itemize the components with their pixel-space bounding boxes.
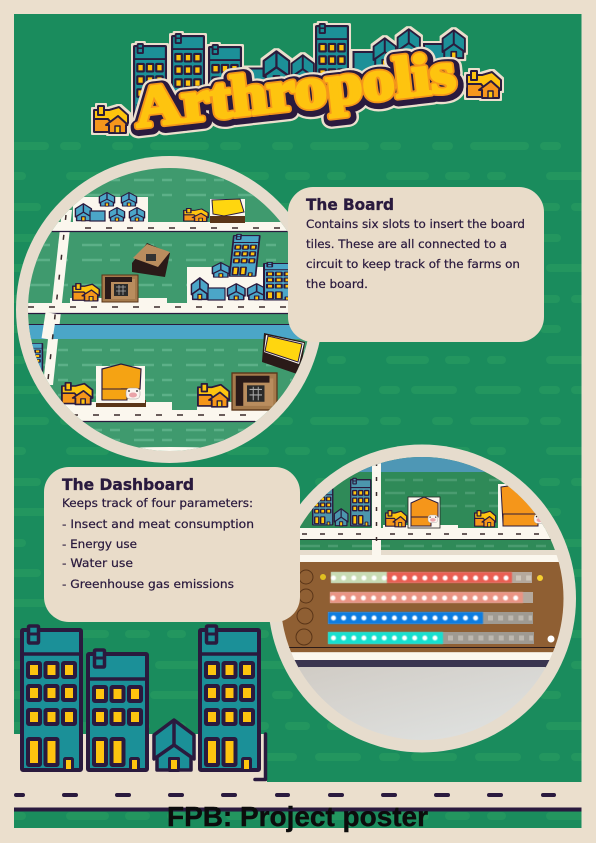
text: dashboard parameters: Keeps track of four parameters: (62, 496, 253, 510)
text: board description: circuit to keep track of the farms on (306, 257, 520, 271)
text: board description (306, 217, 525, 291)
LED bar: water use (328, 612, 533, 624)
logo wordmark: Arthropolis (132, 41, 460, 142)
dashboard icons (296, 570, 313, 645)
logo: Arthropolis (94, 24, 501, 142)
logo wordmark: Arthropolis (131, 39, 458, 140)
text: dashboard parameters: - Insect and meat consumption (62, 517, 254, 531)
logo wordmark: Arthropolis (131, 39, 458, 140)
logo farm houses (94, 71, 501, 133)
text: dashboard parameters: - Energy use (62, 537, 137, 551)
farm pieces (62, 199, 305, 410)
illustration: city buildings (22, 626, 259, 770)
dashboard board scene (300, 463, 551, 555)
panel: the dashboard (44, 467, 300, 622)
heading: the board: The Board (306, 195, 394, 214)
logo city skyline (134, 24, 465, 123)
text: dashboard parameters: - Greenhouse gas emissions (62, 577, 234, 591)
road band (14, 734, 582, 812)
text: board description: Contains six slots to insert the board (306, 217, 525, 231)
title: project poster: FPB: Project poster (167, 801, 428, 832)
text: board description: tiles. These are all connected to a (306, 237, 507, 251)
photo circle: the dashboard (268, 444, 580, 752)
LED bar: greenhouse gas emissions (328, 632, 534, 644)
wooden dashboard panel (270, 562, 580, 652)
heading: the dashboard: The Dashboard (62, 475, 194, 494)
logo wordmark: Arthropolis (132, 41, 460, 142)
LED bar: energy use (330, 592, 533, 603)
blue houses (19, 193, 294, 372)
text: board description: the board. (306, 277, 368, 291)
text: dashboard parameters: - Water use (62, 556, 133, 570)
text: dashboard parameters (62, 496, 254, 591)
board roads and plots (20, 197, 300, 459)
LED bar: insect and meat consumption (331, 572, 532, 583)
panel: the board (288, 187, 544, 342)
photo circle: the board (16, 156, 323, 463)
